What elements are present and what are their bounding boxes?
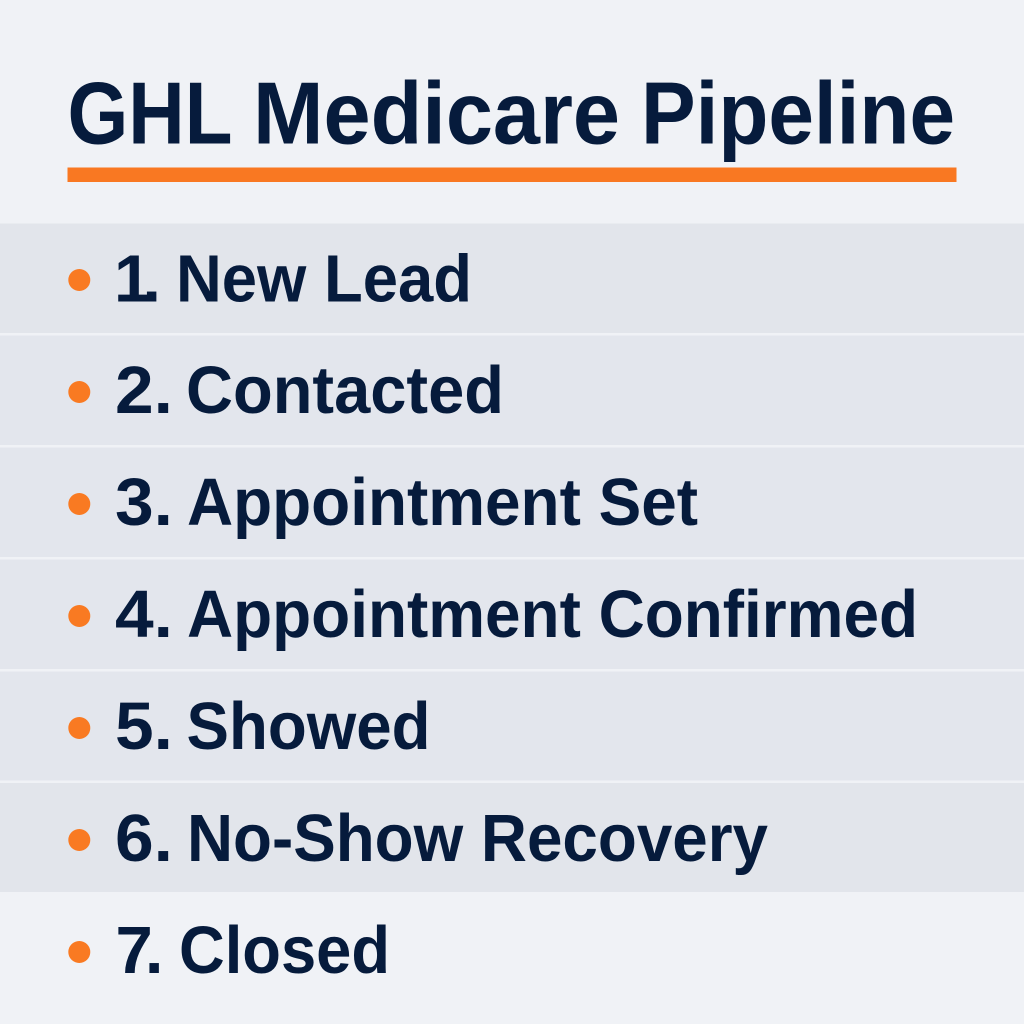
row 5: Showed [0, 672, 1024, 780]
row 5: Showed: Showed [186, 689, 430, 764]
title underline [68, 168, 956, 182]
row 4: Appointment Confirmed: Appointment Confirmed [187, 577, 918, 652]
pipeline list panel [0, 224, 1024, 988]
title: GHL [68, 64, 232, 162]
row 3: Appointment Set [0, 448, 1024, 557]
row 2: Contacted: Contacted [186, 353, 504, 428]
row 7: Closed: Closed [179, 913, 390, 988]
title [68, 64, 955, 162]
row 6: No-Show Recovery: No-Show Recovery [187, 801, 768, 876]
title: Medicare [253, 64, 620, 162]
row 2: Contacted [0, 336, 1024, 445]
row 6: No-Show Recovery [0, 783, 1024, 892]
row 1: New Lead [0, 224, 1024, 333]
row 5: Showed: 5. [115, 689, 173, 764]
title: Pipeline [641, 64, 955, 162]
row 6: No-Show Recovery: 6. [115, 801, 173, 876]
row 3: Appointment Set: 3. [115, 465, 173, 540]
row 4: Appointment Confirmed: 4. [115, 577, 173, 652]
row 1: New Lead: New Lead [176, 242, 472, 316]
row 4: Appointment Confirmed [0, 560, 1024, 669]
row 1: New Lead: 1. [114, 242, 161, 316]
row 7: Closed: 7. [116, 913, 164, 988]
row 2: Contacted: 2. [115, 353, 173, 428]
row 7: Closed [68, 913, 390, 988]
row 3: Appointment Set: Appointment Set [187, 465, 698, 540]
